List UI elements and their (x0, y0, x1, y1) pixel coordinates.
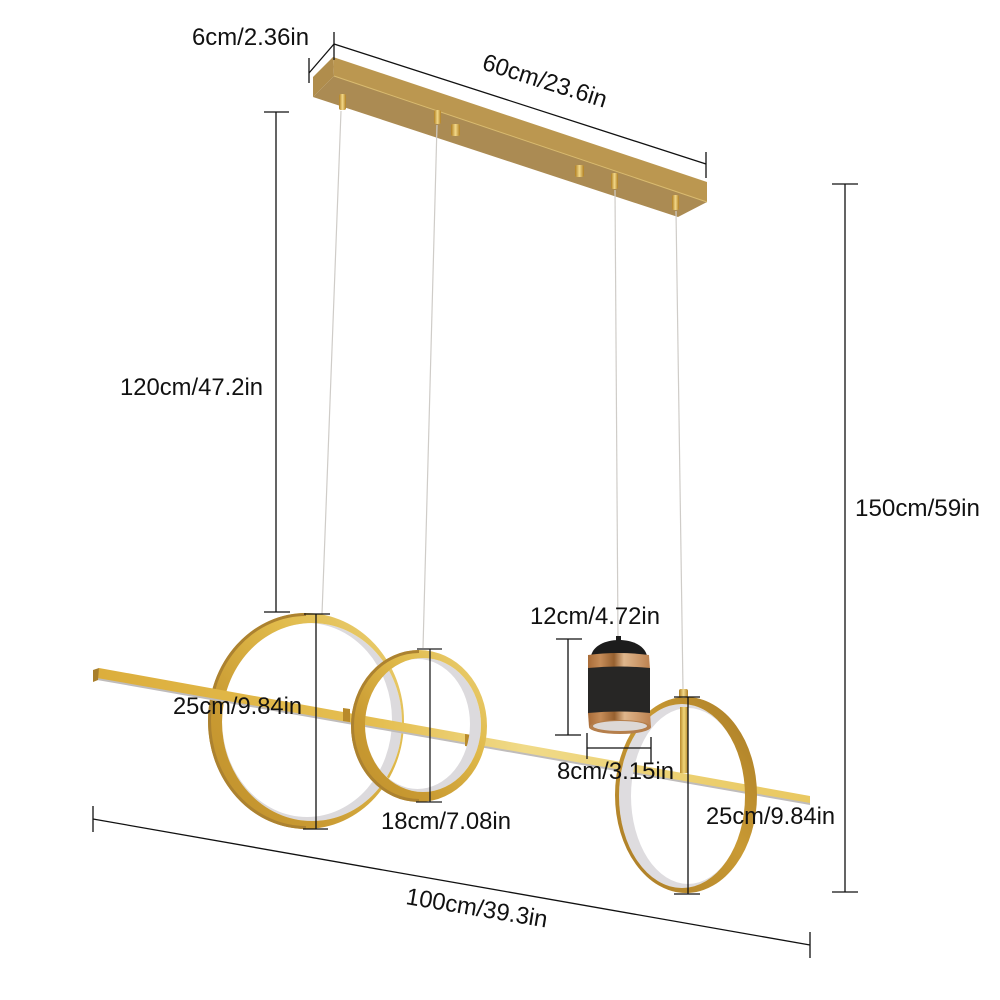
dimension: pendant height 12cm (555, 639, 582, 735)
ring three stem and cap (679, 689, 688, 773)
dimension: pendant width 8cm (587, 733, 651, 763)
ring: large right (615, 697, 757, 893)
label: right ring diameter: 25cm/9.84in (706, 803, 835, 830)
label: total width: 100cm/39.3in (404, 883, 550, 934)
pendant cylinder (588, 636, 651, 734)
dimension: right ring 25cm (674, 697, 700, 894)
dimension: plate depth 6cm (309, 32, 334, 83)
ceiling plate (313, 57, 707, 217)
ring: large left (208, 613, 404, 829)
dimension: plate length 60cm (334, 44, 706, 178)
label: middle ring diameter: 18cm/7.08in (381, 808, 511, 835)
ring: small middle (351, 650, 487, 802)
label: total height: 150cm/59in (855, 495, 980, 522)
label: pendant height: 12cm/4.72in (530, 603, 660, 630)
dimension: middle ring 18cm (416, 649, 442, 802)
label: plate depth: 6cm/2.36in (192, 24, 309, 51)
suspension cables (322, 111, 683, 690)
label: plate length: 60cm/23.6in (479, 49, 610, 114)
label: pendant width: 8cm/3.15in (557, 758, 674, 785)
ceiling mounts (339, 94, 679, 210)
dimension: total height 150cm (832, 184, 858, 892)
label: cable drop: 120cm/47.2in (120, 374, 263, 401)
dimension: total width 100cm (93, 806, 810, 958)
dimension: cable 120cm (264, 112, 290, 612)
label: left ring diameter: 25cm/9.84in (173, 693, 302, 720)
light bar (93, 668, 810, 805)
dimension: left ring 25cm (303, 614, 330, 829)
